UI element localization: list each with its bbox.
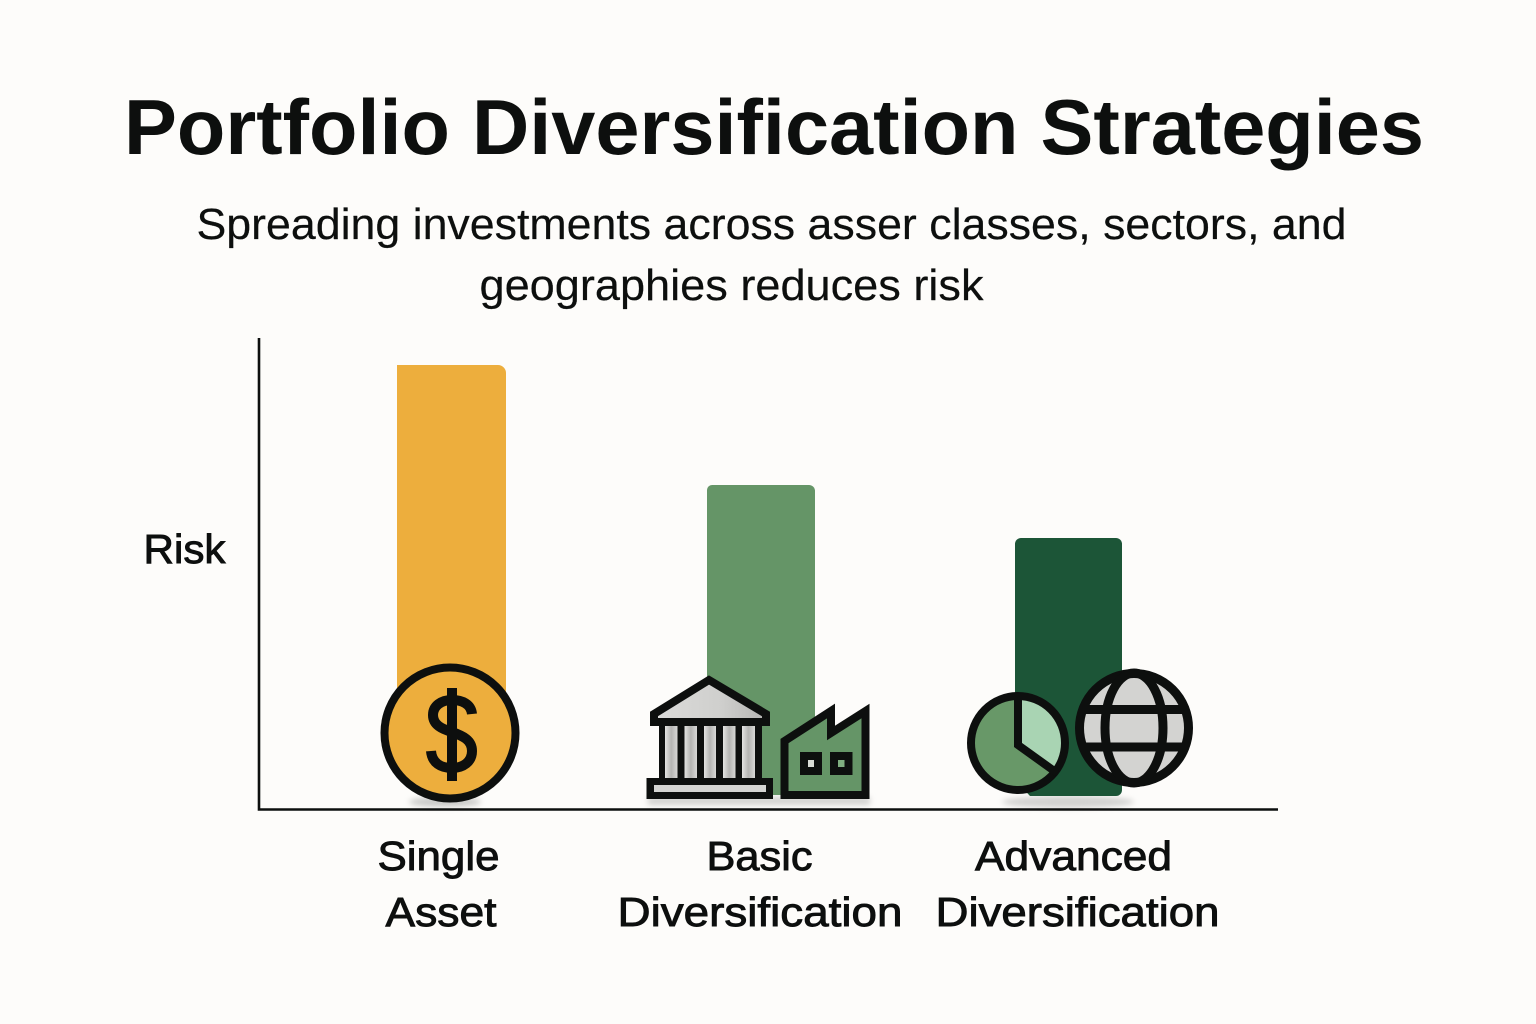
bank base xyxy=(646,778,773,799)
subtitle: Spreading investments across asser classes, sectors, and xyxy=(196,200,1346,249)
y-axis label: Risk: Risk xyxy=(144,526,226,572)
category label: Advanced Diversification: Advanced xyxy=(975,833,1172,879)
bank columns xyxy=(665,726,755,778)
icon: factory xyxy=(784,711,866,795)
subtitle: geographies reduces risk xyxy=(480,261,985,310)
category label: Basic Diversification: Diversification xyxy=(618,889,902,935)
category label: Advanced Diversification: Diversification xyxy=(936,889,1220,935)
category label: Basic Diversification: Basic xyxy=(706,833,812,879)
bar: basic diversification xyxy=(707,485,815,795)
category label: Single Asset: Single xyxy=(378,833,500,879)
bar: single asset xyxy=(397,365,506,740)
bar: advanced diversification xyxy=(1015,538,1122,796)
category label: Advanced Diversification xyxy=(936,833,1220,935)
icon shadows xyxy=(409,796,1134,808)
chart axes xyxy=(259,338,1278,810)
icon: bank building xyxy=(646,680,773,799)
bar chart xyxy=(259,338,1278,810)
subtitle xyxy=(196,200,1346,310)
category label: Single Asset: Asset xyxy=(386,889,497,935)
icon: globe xyxy=(1080,673,1188,783)
title: Portfolio Diversification Strategies xyxy=(124,83,1424,171)
icon: dollar coin xyxy=(384,668,516,798)
category label: Single Asset xyxy=(378,833,500,935)
category label: Basic Diversification xyxy=(618,833,902,935)
icon: pie chart xyxy=(971,695,1066,790)
bank roof xyxy=(654,680,766,722)
